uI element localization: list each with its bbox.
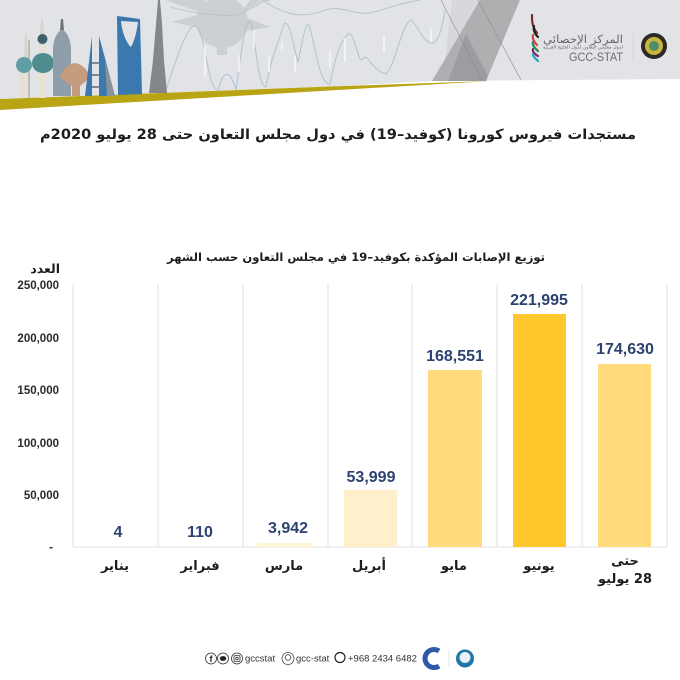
icon: facebook [206, 653, 216, 664]
month labels: مارس [265, 559, 303, 574]
month labels: 28 يوليو [597, 572, 652, 587]
y-axis labels: 250,000 [17, 280, 59, 292]
value labels: 53,999 [347, 469, 396, 486]
month labels: أبريل [352, 557, 386, 574]
social handle: gccstat [245, 654, 275, 664]
value labels [114, 292, 654, 541]
value labels: 110 [187, 524, 213, 541]
month labels: يناير [100, 559, 129, 574]
icon: facebook: f [210, 654, 214, 664]
month labels: مايو [440, 559, 467, 574]
twin sail towers [85, 36, 92, 96]
value labels: 4 [114, 524, 123, 541]
footer contacts [206, 650, 474, 668]
trend lines [166, 0, 445, 90]
icon: quality badge [425, 650, 439, 668]
gold wedge [0, 81, 490, 110]
logo English name: GCC-STAT [569, 50, 624, 64]
grid lines [73, 284, 667, 547]
y-axis labels: 150,000 [17, 385, 59, 397]
y-axis labels [17, 280, 59, 554]
chart title: توزيع الإصابات المؤكدة بكوفيد–19 في مجلس التعاون حسب الشهر [166, 250, 545, 265]
value labels: 3,942 [268, 520, 308, 537]
value labels: 174,630 [596, 341, 654, 358]
virus silhouette [165, 0, 270, 55]
y-axis labels: 50,000 [24, 490, 59, 502]
y-axis labels: - [49, 542, 53, 554]
title: مستجدات فيروس كورونا (كوفيد–19) في دول مجلس التعاون حتى 28 يوليو 2020م [40, 127, 636, 143]
month labels: يونيو [522, 559, 555, 574]
icon: instagram [232, 653, 242, 664]
logo Arabic name: المركز الإحصائي [543, 33, 623, 46]
domed tower [60, 63, 90, 96]
bars [257, 314, 651, 547]
y-axis title: العدد [30, 261, 60, 276]
month labels [100, 554, 652, 587]
icon: Gulf landmarks skyline [16, 0, 167, 98]
logo: GCC-STAT [532, 15, 667, 64]
icon: whatsapp [335, 652, 345, 662]
icon: coloured ribbon [532, 15, 538, 61]
grey ribbon [445, 0, 480, 60]
logo Arabic subtitle: لدول مجلس التعاون لدول الخليج العربية [543, 46, 623, 50]
bar chart [17, 261, 667, 587]
value labels: 168,551 [426, 348, 484, 365]
icon: account [282, 652, 294, 664]
icon: GCC emblem [641, 33, 667, 59]
value labels: 221,995 [510, 292, 568, 309]
white highlights [205, 28, 431, 78]
icon: twitter [218, 653, 228, 664]
y-axis labels: 100,000 [17, 438, 59, 450]
Kuwait towers [16, 20, 54, 98]
month labels: فبراير [179, 559, 220, 574]
website handle: gcc-stat [296, 654, 330, 664]
tall glass tower [53, 29, 71, 96]
Burj tower [149, 0, 167, 93]
header banner [0, 0, 680, 110]
icon: TUV badge [456, 650, 474, 668]
y-axis labels: 200,000 [17, 333, 59, 345]
month labels: حتى [611, 554, 639, 569]
Kingdom Centre [117, 16, 142, 95]
phone number: +968 2434 6482 [348, 654, 417, 664]
